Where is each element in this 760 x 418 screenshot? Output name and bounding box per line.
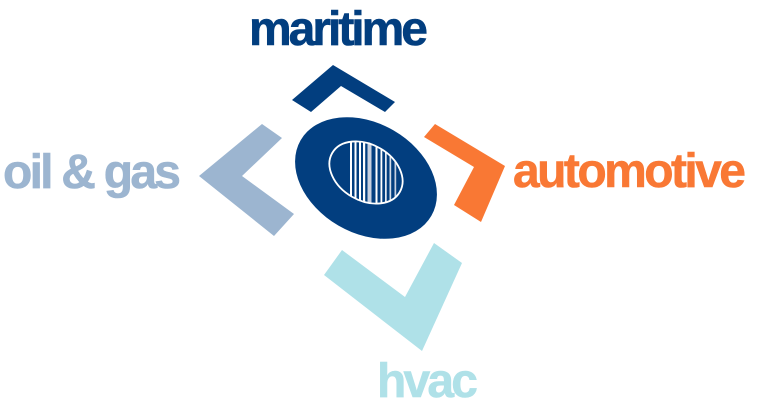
heading: automotive: automotive	[513, 145, 746, 198]
heading: oil & gas: oil & gas	[3, 146, 181, 199]
arrow: maritime chevron	[292, 65, 395, 112]
arrow: hvac chevron	[324, 243, 462, 351]
inner striped ellipse	[328, 140, 404, 204]
arrow: oil and gas chevron	[199, 124, 294, 236]
arrow: automotive chevron	[424, 124, 505, 222]
outer ellipse	[273, 93, 459, 263]
heading: hvac: hvac	[377, 355, 478, 408]
icon: central lens	[295, 117, 437, 239]
heading: maritime: maritime	[249, 3, 428, 56]
